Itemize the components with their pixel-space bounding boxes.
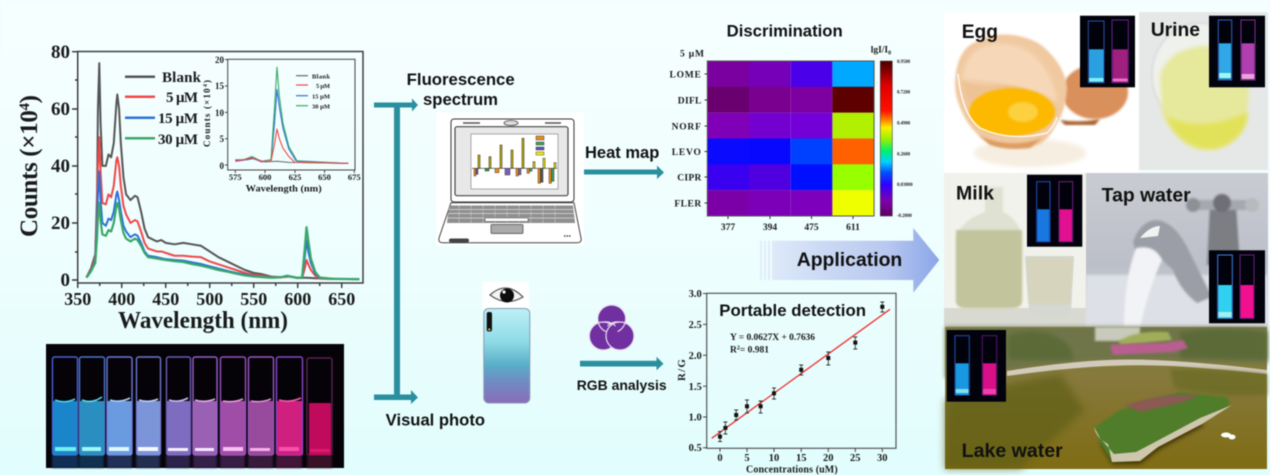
inset chart: 650 <box>318 172 331 182</box>
colour bar: -0.2000 <box>897 214 912 219</box>
inset chart <box>202 55 361 195</box>
x tick labels: 30 <box>877 453 888 464</box>
icon: RGB circles <box>589 305 634 350</box>
data points with error bars <box>718 302 884 442</box>
heading: fluorescence spectrum <box>407 70 515 109</box>
label: egg: Egg <box>962 22 998 43</box>
inset: urine cuvettes <box>1209 16 1265 87</box>
legend: 15 μM <box>158 111 198 127</box>
heat map column labels: 611 <box>846 223 860 233</box>
y tick labels <box>51 42 70 291</box>
inset chart: 30 μM <box>312 104 330 110</box>
arrow: to fluorescence spectrum <box>374 98 418 112</box>
label: concentration: 5 μM <box>680 50 704 60</box>
heat map row labels: LOME <box>669 70 702 80</box>
equation: = 0.981 <box>740 346 769 356</box>
y axis title: Counts (×10 <box>16 110 43 237</box>
fit line <box>712 309 890 438</box>
x tick labels: 0 <box>717 453 723 464</box>
tree reflections <box>945 374 1085 469</box>
heading: fluorescence spectrum: spectrum <box>423 90 498 109</box>
y tick labels: 20 <box>51 213 70 234</box>
island <box>1100 420 1205 464</box>
heading: fluorescence spectrum: Fluorescence <box>407 70 515 89</box>
photo: urine <box>1139 12 1268 170</box>
inset chart: Wavelength (nm) <box>246 184 322 195</box>
y tick labels: 80 <box>51 42 70 63</box>
label: tap water: Tap water <box>1102 186 1191 207</box>
x tick labels: 550 <box>240 289 267 309</box>
inset chart: Counts (×10 <box>202 88 212 147</box>
y tick labels <box>689 289 702 454</box>
photo: egg <box>944 13 1139 173</box>
x tick labels: 5 <box>744 453 750 464</box>
arrow: RGB analysis <box>580 357 664 370</box>
heat map row labels: DIFL <box>678 96 702 106</box>
heat map row labels: FLER <box>674 200 702 210</box>
chart: fluorescence spectrum <box>16 42 363 334</box>
inset chart: 5 <box>220 134 224 144</box>
heading: portable detection: Portable detection <box>719 301 866 320</box>
label: urine: Urine <box>1151 20 1200 41</box>
label: milk: Milk <box>956 182 994 204</box>
heat map row labels: CIPR <box>677 174 702 184</box>
x tick labels: 15 <box>796 453 806 464</box>
x tick labels: 20 <box>823 453 834 464</box>
inset chart: 15 <box>215 81 224 91</box>
x tick labels <box>64 289 355 309</box>
photo: lake water <box>945 327 1267 469</box>
heat map cells <box>707 61 874 216</box>
colour bar <box>880 60 913 219</box>
icon: laptop with bar chart <box>436 113 584 246</box>
y tick labels: 1.5 <box>689 382 702 393</box>
arrow: to heat map <box>584 166 664 179</box>
inset: egg cuvettes <box>1080 16 1135 87</box>
photo: tap water <box>1086 173 1268 327</box>
x tick labels: 500 <box>196 289 223 309</box>
heat map row labels: LEVO <box>672 148 702 158</box>
legend: Blank <box>162 70 202 86</box>
label: heat map: Heat map <box>585 144 659 162</box>
legend: 30 μM <box>158 132 198 148</box>
heading: discrimination: Discrimination <box>727 22 843 41</box>
inset chart: 4 <box>203 84 209 87</box>
inset chart: 15 μM <box>312 94 330 100</box>
x tick labels: 10 <box>769 453 779 464</box>
inset chart: 575 <box>229 172 242 182</box>
y tick labels: 2.5 <box>689 320 702 331</box>
pink flower bed <box>1110 340 1188 355</box>
heat map row labels: NORF <box>672 122 702 132</box>
inset chart: 5 μM <box>316 83 330 90</box>
icon: eye <box>482 282 529 308</box>
inset chart: ) <box>202 80 212 83</box>
equation: 2 <box>737 346 740 352</box>
photo: milk <box>944 173 1086 327</box>
y tick labels: 0 <box>60 270 70 291</box>
x tick labels <box>717 453 888 464</box>
lakeside path <box>1007 360 1267 376</box>
colour bar: 0.2600 <box>897 152 911 158</box>
inset chart: 675 <box>348 172 361 182</box>
equation: Y = 0.0627X + 0.7636 <box>730 333 815 343</box>
x tick labels: 600 <box>284 289 311 309</box>
y tick labels: 60 <box>51 99 70 120</box>
legend: 5 μM <box>166 90 198 106</box>
chart: portable detection <box>676 289 896 475</box>
inset chart: 0 <box>220 161 224 171</box>
x tick labels: 25 <box>850 453 861 464</box>
y axis title: ) <box>16 95 43 103</box>
axis titles: R / G <box>676 359 688 381</box>
y tick labels: 40 <box>51 156 70 177</box>
label: colour bar title: lgI/I <box>871 45 888 55</box>
x tick labels: 450 <box>152 289 179 309</box>
axis titles <box>676 359 838 475</box>
arrow: main vertical stem <box>394 105 400 397</box>
label: application: Application <box>797 249 902 271</box>
equation: R <box>730 346 737 356</box>
x axis title: Wavelength (nm) <box>118 308 288 334</box>
heat map column labels: 394 <box>763 223 777 233</box>
y tick labels: 2.0 <box>689 351 702 362</box>
label: visual photo: Visual photo <box>386 412 485 430</box>
heat map column labels: 377 <box>721 223 735 233</box>
inset chart: Blank <box>312 74 330 80</box>
label: RGB analysis: RGB analysis <box>577 377 667 393</box>
y tick labels: 0.5 <box>689 443 702 454</box>
photo: cuvette series under UV light <box>46 344 344 468</box>
legend <box>125 70 202 148</box>
colour bar: 0.4900 <box>897 122 911 126</box>
inset chart: 10 <box>215 108 224 118</box>
inset: tap water cuvettes <box>1209 250 1265 323</box>
arrow: to visual photo <box>374 390 418 404</box>
label: colour bar title: 0 <box>888 50 891 56</box>
y tick labels: 3.0 <box>689 289 702 300</box>
arrow: application <box>760 228 939 293</box>
spectrum axes <box>72 52 363 288</box>
colour bar: 0.9500 <box>897 60 911 65</box>
x tick labels: 650 <box>328 289 355 309</box>
spectrum curves <box>86 63 359 279</box>
inset chart: 20 <box>215 55 224 65</box>
trees behind the lake <box>945 327 1267 378</box>
heat map column labels <box>721 223 860 233</box>
inset: milk cuvettes <box>1027 175 1082 247</box>
equation <box>730 333 815 356</box>
x tick labels: 350 <box>64 289 91 309</box>
x tick labels: 400 <box>108 289 135 309</box>
icon: smartphone <box>484 308 530 403</box>
chart: heat map <box>669 45 913 233</box>
y axis title: 4 <box>17 102 33 110</box>
colour bar: 0.7200 <box>897 90 911 96</box>
heat map row labels <box>669 70 702 210</box>
inset chart: 600 <box>259 172 271 182</box>
label: lake water: Lake water <box>962 440 1063 462</box>
y tick labels: 1.0 <box>689 412 702 424</box>
inset chart: 625 <box>289 172 301 182</box>
colour bar: 0.03000 <box>897 183 913 188</box>
heat map column labels: 475 <box>804 223 819 233</box>
inset: lake water cuvettes <box>947 330 1006 402</box>
